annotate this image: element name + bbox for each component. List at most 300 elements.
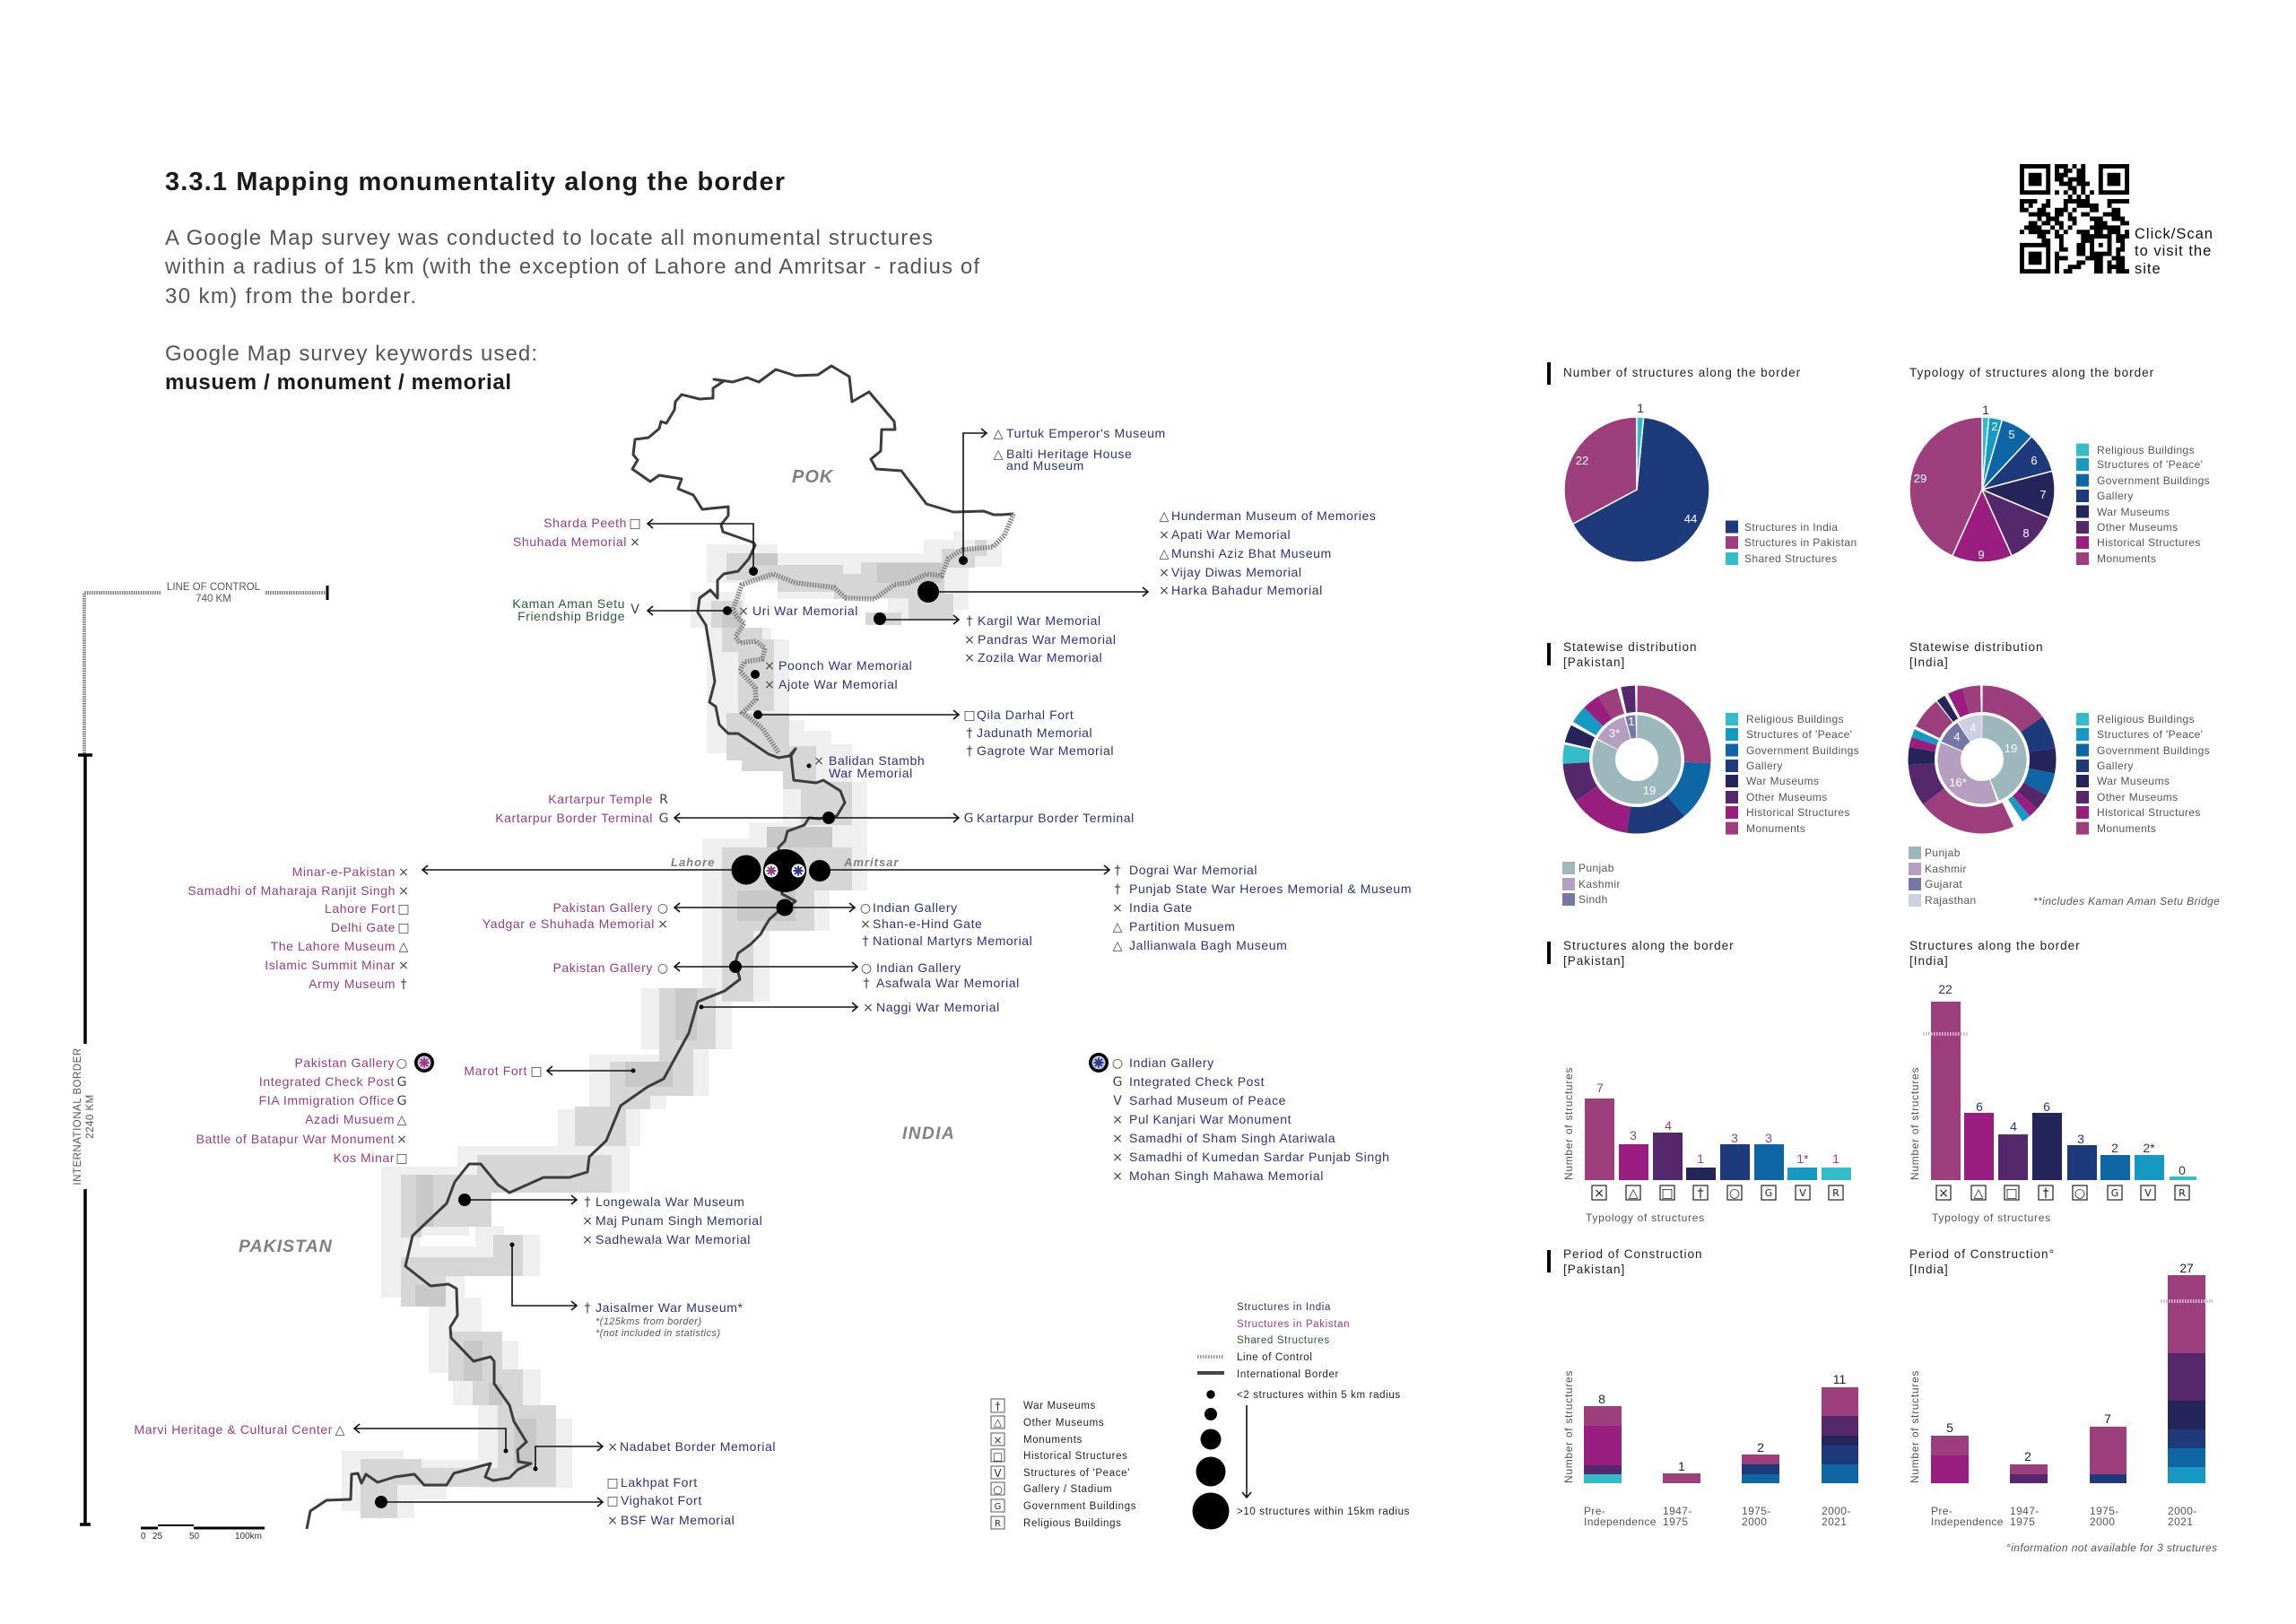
panel: period of construction Pakistan: [Pakistan] <box>1563 1263 1625 1276</box>
panel: statewise distribution India: [India] <box>1909 656 1949 669</box>
labels: India north: × <box>764 659 775 673</box>
panel: structures along the border Pakistan: 3 <box>1765 1131 1772 1145</box>
labels: India Amritsar and Punjab: Samadhi of Kumedan Sardar Punjab Singh <box>1129 1150 1390 1164</box>
labels: India north: △ <box>994 427 1004 441</box>
legend: typology icons: G <box>995 1502 1001 1512</box>
labels: Pakistan Lahore and Punjab: Yadgar e Shuhada Memorial <box>483 916 655 931</box>
labels: India north: † <box>967 726 972 741</box>
panel: statewise distribution Pakistan: Structures of 'Peace' <box>1746 728 1852 741</box>
labels: Pakistan Lahore and Punjab: × <box>396 1133 407 1147</box>
labels: India north: × <box>738 604 749 619</box>
labels: India south: Nadabet Border Memorial <box>620 1439 776 1454</box>
panel: period of construction India: Number of structures <box>1909 1370 1921 1483</box>
labels: India Amritsar and Punjab: Jallianwala Bagh Museum <box>1129 938 1287 952</box>
panel: number of structures: 22 <box>1576 454 1588 467</box>
icons: India typology axis: □ <box>2005 1186 2018 1201</box>
icons: India typology axis <box>1936 1185 2189 1201</box>
donut chart: India inner ring <box>1949 726 2015 793</box>
labels: India south: *(not included in statistics) <box>596 1328 720 1339</box>
panel: typology of structures: Structures of 'Peace' <box>2097 458 2203 471</box>
panel: number of structures: Structures in India <box>1744 521 1838 534</box>
labels: Pakistan north <box>495 516 668 826</box>
panel: typology of structures: 9 <box>1978 548 1985 561</box>
labels: Pakistan north: Kartarpur Border Terminal <box>495 811 653 825</box>
labels: Pakistan Lahore and Punjab: Minar-e-Pakistan <box>292 864 396 879</box>
panel: period of construction Pakistan: 1 <box>1678 1459 1685 1473</box>
labels: India Amritsar and Punjab: × <box>1112 1169 1123 1184</box>
labels: India Amritsar and Punjab: △ <box>1113 920 1123 934</box>
icons: India typology axis: † <box>2043 1186 2048 1201</box>
icons: India typology axis: ○ <box>2074 1186 2085 1201</box>
labels: India Amritsar and Punjab <box>860 863 1412 1184</box>
labels: India south: Longewala War Museum <box>596 1194 744 1209</box>
bar chart: India typology <box>1923 1002 2196 1180</box>
labels: India north: × <box>1159 528 1170 543</box>
panel: statewise distribution Pakistan: 1 <box>1628 715 1635 728</box>
labels: Pakistan Lahore and Punjab: Kos Minar <box>334 1151 395 1165</box>
QR caption <box>2135 226 2213 277</box>
icon: India border star <box>1089 1053 1109 1073</box>
labels: India north <box>738 426 1376 826</box>
labels: India north: Kargil War Memorial <box>978 613 1101 628</box>
panel: typology of structures: Monuments <box>2097 552 2156 565</box>
labels: India north: Balidan Stambh <box>829 753 925 768</box>
labels: India south: × <box>607 1514 618 1528</box>
labels: India south: Jaisalmer War Museum* <box>596 1300 744 1315</box>
labels: India Amritsar and Punjab: × <box>863 1001 874 1015</box>
labels: India north: × <box>1159 584 1170 598</box>
panel: typology of structures: Other Museums <box>2097 521 2179 534</box>
labels: India Amritsar and Punjab: V <box>1113 1094 1122 1108</box>
region labels: PAKISTAN <box>239 1237 333 1256</box>
panel: statewise distribution India: Punjab <box>1925 847 1961 859</box>
panel: period of construction India: Independence <box>1931 1515 2004 1528</box>
labels: India south: × <box>582 1214 593 1229</box>
labels: Pakistan Lahore and Punjab: FIA Immigration Office <box>259 1093 395 1107</box>
legend: typology icons: Historical Structures <box>1023 1451 1128 1462</box>
length bracket: line of control: 740 KM <box>196 594 231 604</box>
labels: India north: Harka Bahadur Memorial <box>1171 583 1323 597</box>
length bracket: international border: 2240 KM <box>85 1094 96 1139</box>
panel: period of construction Pakistan: Independence <box>1584 1515 1657 1528</box>
labels: India Amritsar and Punjab: Punjab State War Heroes Memorial & Museum <box>1129 881 1412 896</box>
panel: typology of structures: Gallery <box>2097 490 2134 502</box>
icons: Pakistan typology axis <box>1592 1185 1843 1201</box>
legend: typology icons: Government Buildings <box>1023 1501 1136 1512</box>
scale bar: 25 <box>152 1532 163 1541</box>
legend: colours, lines and marker sizes: <2 structures within 5 km radius <box>1237 1390 1401 1401</box>
labels: India north: Zozila War Memorial <box>978 650 1102 664</box>
panel: statewise distribution Pakistan: 19 <box>1643 784 1656 797</box>
labels: India north: Poonch War Memorial <box>778 658 912 673</box>
panel: structures along the border India: Structures along the border <box>1909 939 2081 952</box>
stacked bar chart: India period <box>1931 1275 2213 1483</box>
labels: India north: △ <box>1160 509 1170 524</box>
legend: typology icons: R <box>995 1519 1001 1529</box>
labels: India north: Vijay Diwas Memorial <box>1171 565 1302 579</box>
region labels: Amritsar <box>843 855 899 869</box>
labels: India Amritsar and Punjab: Asafwala War Memorial <box>876 976 1020 990</box>
intro text: 30 km) from the border. <box>165 284 416 308</box>
pie chart: typology <box>1909 417 2055 562</box>
panel: period of construction Pakistan: 11 <box>1833 1372 1846 1386</box>
labels: India Amritsar and Punjab: India Gate <box>1129 900 1193 915</box>
labels: India south: † <box>585 1301 590 1316</box>
labels: India Amritsar and Punjab: Dograi War Memorial <box>1129 863 1257 877</box>
scale bar: 100km <box>235 1532 262 1541</box>
labels: Pakistan Lahore and Punjab: Lahore Fort <box>325 901 396 916</box>
panel: statewise distribution Pakistan: Kashmir <box>1578 878 1621 890</box>
panel: period of construction Pakistan: Number of structures <box>1562 1370 1575 1483</box>
panel: statewise distribution India: Rajasthan <box>1925 894 1977 907</box>
labels: India Amritsar and Punjab: × <box>1112 1151 1123 1165</box>
labels: Pakistan north: R <box>659 793 668 807</box>
panel: structures along the border Pakistan: 1* <box>1796 1151 1809 1166</box>
scale bar <box>141 1525 265 1541</box>
panel: structures along the border India: 6 <box>1976 1099 1983 1114</box>
labels: Pakistan Lahore and Punjab: △ <box>397 1113 407 1127</box>
labels: India south: BSF War Memorial <box>621 1513 735 1527</box>
panel: period of construction India: 5 <box>1946 1420 1953 1435</box>
panel: period of construction India: 2 <box>2024 1449 2031 1463</box>
labels: Pakistan north: □ <box>629 517 641 531</box>
labels: India Amritsar and Punjab: ○ <box>860 901 871 916</box>
panel: typology of structures: 5 <box>2008 428 2015 441</box>
labels: Pakistan Lahore and Punjab: Marot Fort <box>464 1064 527 1078</box>
labels: Pakistan Lahore and Punjab: Battle of Batapur War Monument <box>196 1132 395 1146</box>
labels: Pakistan Lahore and Punjab: □ <box>396 1151 408 1166</box>
panel: period of construction India: 1975 <box>2010 1515 2035 1528</box>
icons: India typology axis: × <box>1938 1186 1949 1201</box>
labels: Pakistan Lahore and Punjab: Pakistan Gallery <box>294 1055 395 1070</box>
icons: India typology axis: G <box>2111 1187 2118 1199</box>
panel: statewise distribution India <box>1909 640 2220 908</box>
icons: Pakistan typology axis: × <box>1594 1186 1605 1201</box>
labels: Pakistan Lahore and Punjab: △ <box>335 1423 345 1437</box>
panel: period of construction India: 2000- <box>2168 1505 2197 1517</box>
panel: number of structures: Shared Structures <box>1744 552 1838 565</box>
labels: India Amritsar and Punjab: Indian Gallery <box>876 960 961 975</box>
panel: typology of structures: War Museums <box>2097 506 2170 518</box>
labels: India Amritsar and Punjab: Indian Gallery <box>1129 1055 1214 1070</box>
labels: India north: Apati War Memorial <box>1171 527 1291 542</box>
labels: India south: □ <box>606 1494 619 1508</box>
panel: statewise distribution India: Other Museums <box>2097 791 2179 803</box>
icons: Pakistan typology axis: △ <box>1629 1186 1639 1201</box>
panel: structures along the border India: 0 <box>2179 1163 2186 1177</box>
panel: typology of structures: 6 <box>2031 454 2038 467</box>
panel: number of structures: 1 <box>1637 401 1644 415</box>
panel: period of construction India: 1975- <box>2090 1505 2119 1517</box>
panel: period of construction Pakistan: 2 <box>1757 1440 1764 1455</box>
labels: Pakistan Lahore and Punjab: Azadi Musuem <box>305 1112 395 1126</box>
panel: number of structures: 44 <box>1684 512 1697 525</box>
panel: period of construction Pakistan: Period of Construction <box>1563 1247 1703 1261</box>
legend: colours, lines and marker sizes: Structures in India <box>1237 1302 1331 1313</box>
labels: India north: × <box>813 754 824 769</box>
labels: India south: × <box>607 1440 618 1455</box>
labels: Pakistan Lahore and Punjab: Integrated Check Post <box>259 1074 395 1089</box>
scale bar: 50 <box>189 1532 200 1541</box>
labels: Pakistan Lahore and Punjab: × <box>398 884 409 899</box>
bar chart: Pakistan typology <box>1585 1099 1851 1180</box>
panel: period of construction India <box>1909 1247 2217 1554</box>
length bracket: line of control: LINE OF CONTROL <box>167 582 261 593</box>
panel: typology of structures: 7 <box>2039 488 2047 501</box>
QR code <box>2020 166 2129 272</box>
labels: India Amritsar and Punjab: † <box>1114 864 1121 878</box>
panel: structures along the border India: [India] <box>1909 954 1949 968</box>
panel: statewise distribution Pakistan: Gallery <box>1746 760 1783 772</box>
panel: statewise distribution Pakistan: [Pakistan] <box>1563 656 1625 669</box>
labels: India Amritsar and Punjab: Sarhad Museum of Peace <box>1129 1093 1286 1107</box>
panel: structures along the border Pakistan: 1 <box>1697 1151 1704 1166</box>
labels: India north: × <box>764 678 775 692</box>
panel: typology of structures: Historical Structures <box>2097 536 2201 549</box>
labels: India south: Sadhewala War Memorial <box>596 1232 751 1246</box>
panel: structures along the border India: 6 <box>2043 1099 2050 1114</box>
panel: statewise distribution Pakistan: War Museums <box>1746 775 1819 787</box>
labels: India Amritsar and Punjab: Pul Kanjari War Monument <box>1129 1112 1292 1126</box>
legend: typology icons: † <box>996 1400 1001 1412</box>
icons: Pakistan typology axis: R <box>1832 1187 1839 1199</box>
legend: typology icons: Other Museums <box>1023 1418 1104 1429</box>
panel: number of structures <box>1547 362 1857 565</box>
icons: Pakistan typology axis: G <box>1765 1187 1772 1199</box>
panel: statewise distribution Pakistan: 3* <box>1609 726 1620 740</box>
labels: India Amritsar and Punjab: Mohan Singh Mahawa Memorial <box>1129 1168 1324 1183</box>
labels: Pakistan Lahore and Punjab: □ <box>530 1064 543 1079</box>
labels: India north: Uri War Memorial <box>752 604 858 618</box>
panel: structures along the border Pakistan: Number of structures <box>1562 1067 1575 1180</box>
panel: period of construction Pakistan <box>1547 1247 1858 1528</box>
panel: statewise distribution Pakistan: Other Museums <box>1746 791 1828 803</box>
donut chart: India outer ring <box>1921 699 2043 821</box>
labels: Pakistan north: Sharda Peeth <box>544 516 627 530</box>
stacked bar chart: Pakistan period <box>1584 1387 1858 1483</box>
panel: period of construction Pakistan: 2021 <box>1822 1515 1847 1528</box>
labels: India Amritsar and Punjab: × <box>1112 1113 1123 1127</box>
panel: structures along the border Pakistan: [Pakistan] <box>1563 954 1625 968</box>
labels: Pakistan north: G <box>659 812 668 826</box>
labels: India Amritsar and Punjab: ○ <box>861 961 872 976</box>
labels: Pakistan Lahore and Punjab: Army Museum <box>309 977 396 991</box>
panel: number of structures: Number of structures along the border <box>1563 366 1801 379</box>
labels: India Amritsar and Punjab: G <box>1113 1075 1122 1090</box>
labels: Pakistan Lahore and Punjab: ○ <box>657 961 668 976</box>
panel: structures along the border India: Typology of structures <box>1932 1211 2051 1224</box>
labels: India north: † <box>967 744 972 759</box>
panel: period of construction Pakistan: Pre- <box>1584 1505 1605 1517</box>
length bracket: line of control <box>84 582 327 755</box>
labels: India south: Maj Punam Singh Memorial <box>596 1213 762 1228</box>
icon: shared border-crossing markers <box>764 864 805 877</box>
labels: India south: † <box>585 1195 590 1210</box>
labels: India north: War Memorial <box>829 766 913 780</box>
labels: India north: □ <box>963 708 976 723</box>
panel: period of construction Pakistan: 1947- <box>1663 1505 1692 1517</box>
panel: period of construction Pakistan: 8 <box>1598 1392 1605 1406</box>
labels: India Amritsar and Punjab: † <box>863 977 870 991</box>
panel: period of construction India: Period of Construction° <box>1909 1247 2055 1261</box>
labels: Pakistan Lahore and Punjab: Marvi Heritage & Cultural Center <box>135 1422 333 1437</box>
panel: period of construction Pakistan: 1975- <box>1742 1505 1771 1517</box>
panel: period of construction India: 7 <box>2104 1411 2111 1426</box>
labels: India south: □ <box>606 1476 619 1490</box>
labels: Pakistan Lahore and Punjab: × <box>657 917 668 932</box>
panel: statewise distribution India: 16* <box>1949 776 1967 789</box>
icons: Pakistan typology axis: † <box>1697 1186 1704 1201</box>
labels: Pakistan Lahore and Punjab: □ <box>397 921 410 935</box>
labels: Pakistan Lahore and Punjab: × <box>398 959 409 973</box>
labels: Pakistan Lahore and Punjab: Pakistan Gallery <box>552 960 653 975</box>
panel: typology of structures: Religious Buildings <box>2097 444 2195 456</box>
legend: colours, lines and marker sizes <box>1193 1302 1410 1530</box>
legend: typology icons: Monuments <box>1023 1435 1083 1446</box>
legend: typology icons: ○ <box>993 1483 1003 1496</box>
intro text: within a radius of 15 km (with the exception of Lahore and Amritsar - radius of <box>164 255 979 279</box>
labels: shared Kaman bridge: V <box>631 603 639 617</box>
labels: India north: Hunderman Museum of Memories <box>1171 508 1376 523</box>
panel: typology of structures: Government Buildings <box>2097 474 2210 487</box>
legend: typology icons: △ <box>994 1416 1003 1429</box>
panel: statewise distribution Pakistan: Sindh <box>1578 893 1608 906</box>
labels: India south: Lakhpat Fort <box>621 1475 698 1489</box>
labels: India north: Pandras War Memorial <box>978 632 1117 647</box>
map: international border <box>307 366 1013 1529</box>
intro text: musuem / monument / memorial <box>165 370 511 395</box>
panel: structures along the border Pakistan: 3 <box>1731 1131 1738 1145</box>
labels: India Amritsar and Punjab: Naggi War Memorial <box>876 1000 1000 1014</box>
panel: period of construction India: °information not available for 3 structures <box>2006 1541 2217 1554</box>
labels: Pakistan Lahore and Punjab: † <box>400 977 407 992</box>
icons: India typology axis: V <box>2144 1187 2152 1199</box>
region labels: INDIA <box>902 1125 955 1143</box>
title: 3.3.1 Mapping monumentality along the border <box>165 168 785 196</box>
donut chart: Pakistan outer ring <box>1576 699 1698 821</box>
donut chart: Pakistan inner ring <box>1604 726 1670 793</box>
map: connector arrows <box>354 433 1148 1502</box>
labels: India Amritsar and Punjab: ○ <box>1112 1056 1123 1071</box>
legend: typology icons <box>991 1399 1136 1529</box>
labels: India north: Kartarpur Border Terminal <box>977 811 1135 825</box>
labels: Pakistan Lahore and Punjab: Samadhi of Maharaja Ranjit Singh <box>187 883 396 898</box>
icons: Pakistan typology axis: ○ <box>1729 1186 1740 1201</box>
panel: statewise distribution India: **includes Kaman Aman Setu Bridge <box>2033 895 2220 908</box>
labels: Pakistan Lahore and Punjab: × <box>398 865 409 880</box>
panel: structures along the border India <box>1909 939 2196 1224</box>
labels: India Amritsar and Punjab: National Martyrs Memorial <box>873 934 1032 948</box>
legend: typology icons: □ <box>993 1450 1003 1463</box>
intro text: A Google Map survey was conducted to locate all monumental structures <box>165 226 933 250</box>
map: line of control <box>733 514 1013 752</box>
labels: India Amritsar and Punjab: × <box>860 917 871 932</box>
panel: structures along the border India: 22 <box>1938 982 1952 996</box>
labels: Pakistan Lahore and Punjab: ○ <box>396 1056 407 1071</box>
labels: India south: Vighakot Fort <box>621 1493 702 1507</box>
icons: Pakistan typology axis: V <box>1799 1187 1806 1199</box>
labels: India north: × <box>964 633 975 647</box>
legend: typology icons: Religious Buildings <box>1023 1518 1122 1529</box>
labels: Pakistan Lahore and Punjab: □ <box>397 902 410 916</box>
labels: India north: Ajote War Memorial <box>778 677 898 691</box>
panel: structures along the border India: 2 <box>2111 1141 2118 1155</box>
panel: period of construction India: 2000 <box>2090 1515 2115 1528</box>
region labels <box>239 467 955 1256</box>
panel: structures along the border Pakistan <box>1547 939 1851 1224</box>
panel: statewise distribution Pakistan: Government Buildings <box>1746 744 1859 757</box>
legend: typology icons: War Museums <box>1023 1401 1096 1411</box>
region labels: POK <box>792 467 834 487</box>
legend: colours, lines and marker sizes: Line of Control <box>1237 1352 1313 1363</box>
panel: statewise distribution India: Gallery <box>2097 760 2134 772</box>
panel: period of construction Pakistan: 2000 <box>1742 1515 1767 1528</box>
panel: statewise distribution India: 4 <box>1953 730 1961 743</box>
pie chart: structures by country <box>1564 417 1709 562</box>
panel: statewise distribution India: Monuments <box>2097 822 2156 835</box>
panel: statewise distribution India: 4 <box>1970 721 1977 734</box>
legend: typology icons: V <box>994 1467 1002 1480</box>
labels: India north: △ <box>1160 547 1170 561</box>
panel: structures along the border Pakistan: Typology of structures <box>1586 1211 1705 1224</box>
labels: India Amritsar and Punjab: Partition Musuem <box>1129 919 1236 934</box>
labels: India north: Jadunath Memorial <box>977 725 1092 740</box>
map: 15 km buffer zones <box>342 531 1002 1518</box>
legend: colours, lines and marker sizes: International Border <box>1237 1369 1339 1380</box>
panel: typology of structures: 1 <box>1982 403 1989 417</box>
QR caption: site <box>2135 261 2161 277</box>
labels: India Amritsar and Punjab: † <box>1114 882 1121 897</box>
QR caption: to visit the <box>2135 243 2212 259</box>
panel: typology of structures: 2 <box>1991 420 1998 433</box>
labels: India Amritsar and Punjab: Shan-e-Hind Gate <box>873 916 982 931</box>
labels: shared Kaman bridge: Friendship Bridge <box>517 609 625 623</box>
labels: Pakistan Lahore and Punjab <box>135 864 668 1437</box>
panel: structures along the border Pakistan: 1 <box>1832 1151 1839 1166</box>
panel: period of construction India: 27 <box>2179 1261 2194 1275</box>
labels: Pakistan north: Shuhada Memorial <box>513 534 627 549</box>
labels: India north: △ <box>994 447 1004 462</box>
panel: period of construction Pakistan: 2000- <box>1822 1505 1851 1517</box>
labels: India north: Munshi Aziz Bhat Museum <box>1171 546 1332 560</box>
labels: Pakistan north: Kartarpur Temple <box>548 792 653 806</box>
scale bar: 0 <box>141 1532 146 1541</box>
labels: India north: G <box>964 812 973 826</box>
panel: structures along the border India: 3 <box>2077 1132 2084 1146</box>
labels: India north: Gagrote War Memorial <box>977 743 1114 758</box>
panel: statewise distribution India: 19 <box>2005 742 2017 755</box>
length bracket: international border <box>73 755 96 1524</box>
panel: typology of structures: 8 <box>2022 526 2030 540</box>
panel: structures along the border Pakistan: 3 <box>1630 1128 1637 1142</box>
panel: structures along the border Pakistan: Structures along the border <box>1563 939 1735 952</box>
labels: India north: and Museum <box>1006 458 1084 473</box>
labels: India south: *(125kms from border) <box>596 1316 701 1327</box>
legend: typology icons: Gallery / Stadium <box>1023 1484 1112 1495</box>
labels: India north: Balti Heritage House <box>1006 447 1132 461</box>
region labels: Lahore <box>671 855 715 869</box>
panel: structures along the border Pakistan: 4 <box>1665 1118 1672 1133</box>
panel: statewise distribution India: Historical Structures <box>2097 806 2201 819</box>
intro text: Google Map survey keywords used: <box>165 342 537 366</box>
labels: India south <box>582 1194 776 1528</box>
panel: period of construction India: 2021 <box>2168 1515 2193 1528</box>
panel: statewise distribution Pakistan <box>1547 640 1859 906</box>
map: site markers <box>375 556 968 1508</box>
panel: typology of structures: 29 <box>1914 472 1926 485</box>
legend: typology icons: × <box>993 1434 1003 1446</box>
labels: Pakistan Lahore and Punjab: Islamic Summit Minar <box>265 958 396 972</box>
